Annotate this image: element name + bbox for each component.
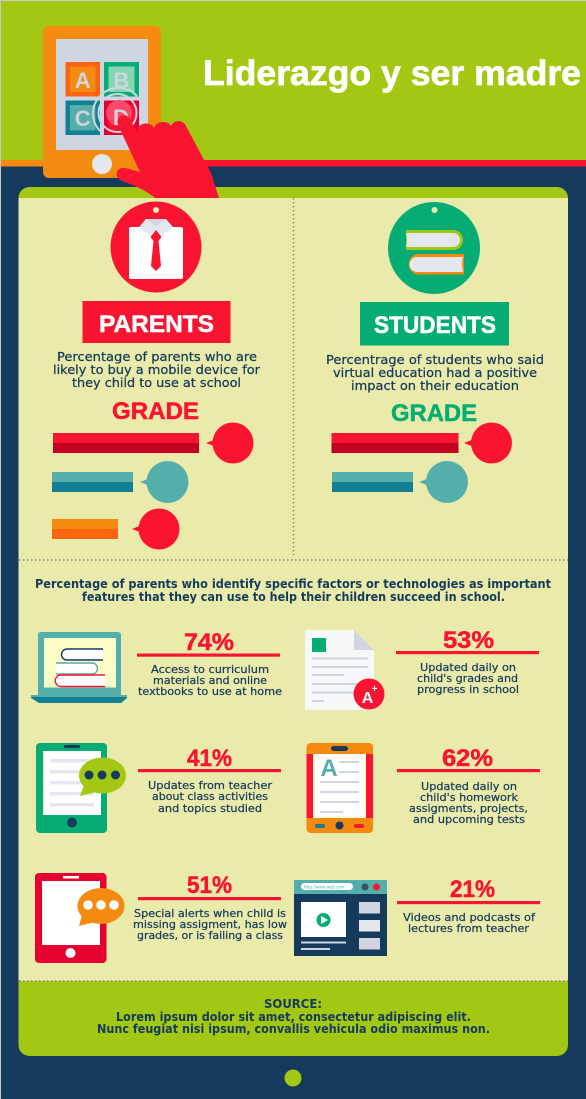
source text: [97, 997, 490, 1036]
icon: document with A+ grade: [305, 630, 384, 710]
stat: 41%: and topics studied: [158, 803, 262, 815]
stat: 51%: 51%: [187, 872, 232, 899]
text: parents description: they child to use at school: [72, 375, 241, 390]
footer dot: [284, 1070, 302, 1086]
heading: students: [360, 302, 509, 346]
stat: 53%: progress in school: [417, 684, 519, 696]
text: students description: Percentrage of students who said: [326, 352, 544, 367]
icon: tablet with ABC tiles and pointing hand: A: [75, 68, 91, 93]
stat: 21%: 21%: [450, 876, 495, 903]
stat: 51%: grades, or is failing a class: [137, 930, 283, 942]
stat: 53%: Updated daily on: [420, 662, 516, 674]
text: parents description: likely to buy a mobile device for: [53, 362, 261, 377]
heading: students grade: GRADE: [391, 400, 477, 427]
text: parents description: Percentage of parents who are: [57, 349, 257, 364]
stat: 74%: 74%: [184, 629, 234, 656]
divider lines: [19, 198, 568, 981]
icon: shirt and tie: [110, 202, 202, 292]
icon: tablet with ABC tiles and pointing hand: [43, 26, 219, 198]
text: parents description: [53, 349, 261, 390]
panel: parents: [52, 202, 261, 550]
icon: tablet with ABC tiles and pointing hand: C: [75, 106, 91, 131]
stat: 62%: and upcoming tests: [413, 814, 525, 826]
stat: 74%: materials and online: [153, 675, 267, 687]
section heading: [35, 577, 551, 604]
bar chart: students grades: [332, 422, 512, 503]
icon: red tablet with chat bubble: [35, 873, 124, 963]
stat: 74%: textbooks to use at home: [138, 686, 282, 698]
stat: 53%: 53%: [443, 627, 494, 654]
panel: students: [326, 202, 544, 503]
icon: laptop with books: [31, 632, 127, 703]
text: students description: [326, 352, 544, 393]
stat: 62%: 62%: [442, 745, 493, 772]
icon: document with A+ grade: +: [372, 684, 378, 695]
stat: 62%: [397, 745, 540, 826]
heading: parents: [82, 301, 230, 343]
icon: document with A+ grade: A: [362, 690, 374, 707]
stat: 74%: [137, 629, 282, 698]
title: Liderazgo y ser madre: [203, 54, 581, 93]
section heading: features that they can use to help their children succeed in school.: [82, 590, 505, 604]
main panel: [18, 187, 568, 1056]
source text: Nunc feugiat nisi ipsum, convallis vehicula odio maximus non.: [97, 1022, 490, 1036]
stat: 62%: Updated daily on: [421, 781, 517, 793]
heading: students: STUDENTS: [374, 312, 496, 339]
icon: stack of books: [388, 202, 480, 294]
stat: 21%: Videos and podcasts of: [403, 912, 535, 924]
icon: orange tablet with document: [306, 743, 373, 833]
text: students description: virtual education had a positive: [333, 365, 537, 380]
icon: orange tablet with document: A: [320, 755, 338, 782]
stat: 41%: 41%: [187, 745, 232, 772]
heading: parents grade: GRADE: [112, 398, 199, 425]
stat: 53%: [396, 627, 539, 696]
icon: video browser window: http://www.web.com: [304, 884, 344, 890]
icon: tablet with ABC tiles and pointing hand: B: [114, 68, 129, 93]
stat: 51%: missing assigment, has low: [133, 919, 287, 931]
heading: parents: PARENTS: [99, 311, 214, 338]
icon: green tablet with chat bubble: [36, 743, 126, 833]
icon: tablet with ABC tiles and pointing hand: D: [113, 105, 129, 130]
stat: 51%: [133, 872, 287, 942]
stat: 41%: about class activities: [152, 791, 268, 803]
bar chart: parents grades: [52, 422, 254, 550]
stat: 51%: Special alerts when child is: [134, 908, 286, 920]
stat: 74%: Access to curriculum: [151, 664, 269, 676]
source text: Lorem ipsum dolor sit amet, consectetur adipiscing elit.: [116, 1010, 471, 1024]
stat: 41%: [138, 745, 281, 815]
icon: video browser window: [294, 880, 387, 956]
section heading: Percentage of parents who identify specific factors or technologies as important: [35, 577, 551, 591]
stat: 21%: [397, 876, 540, 935]
source text: SOURCE:: [264, 997, 322, 1011]
stat: 62%: child's homework: [420, 792, 519, 804]
stat: 21%: lectures from teacher: [408, 923, 530, 935]
stat: 53%: child's grades and: [417, 673, 518, 685]
stat: 41%: Updates from teacher: [148, 780, 273, 792]
stat: 62%: assigments, projects,: [409, 803, 528, 815]
text: students description: impact on their education: [351, 378, 519, 393]
